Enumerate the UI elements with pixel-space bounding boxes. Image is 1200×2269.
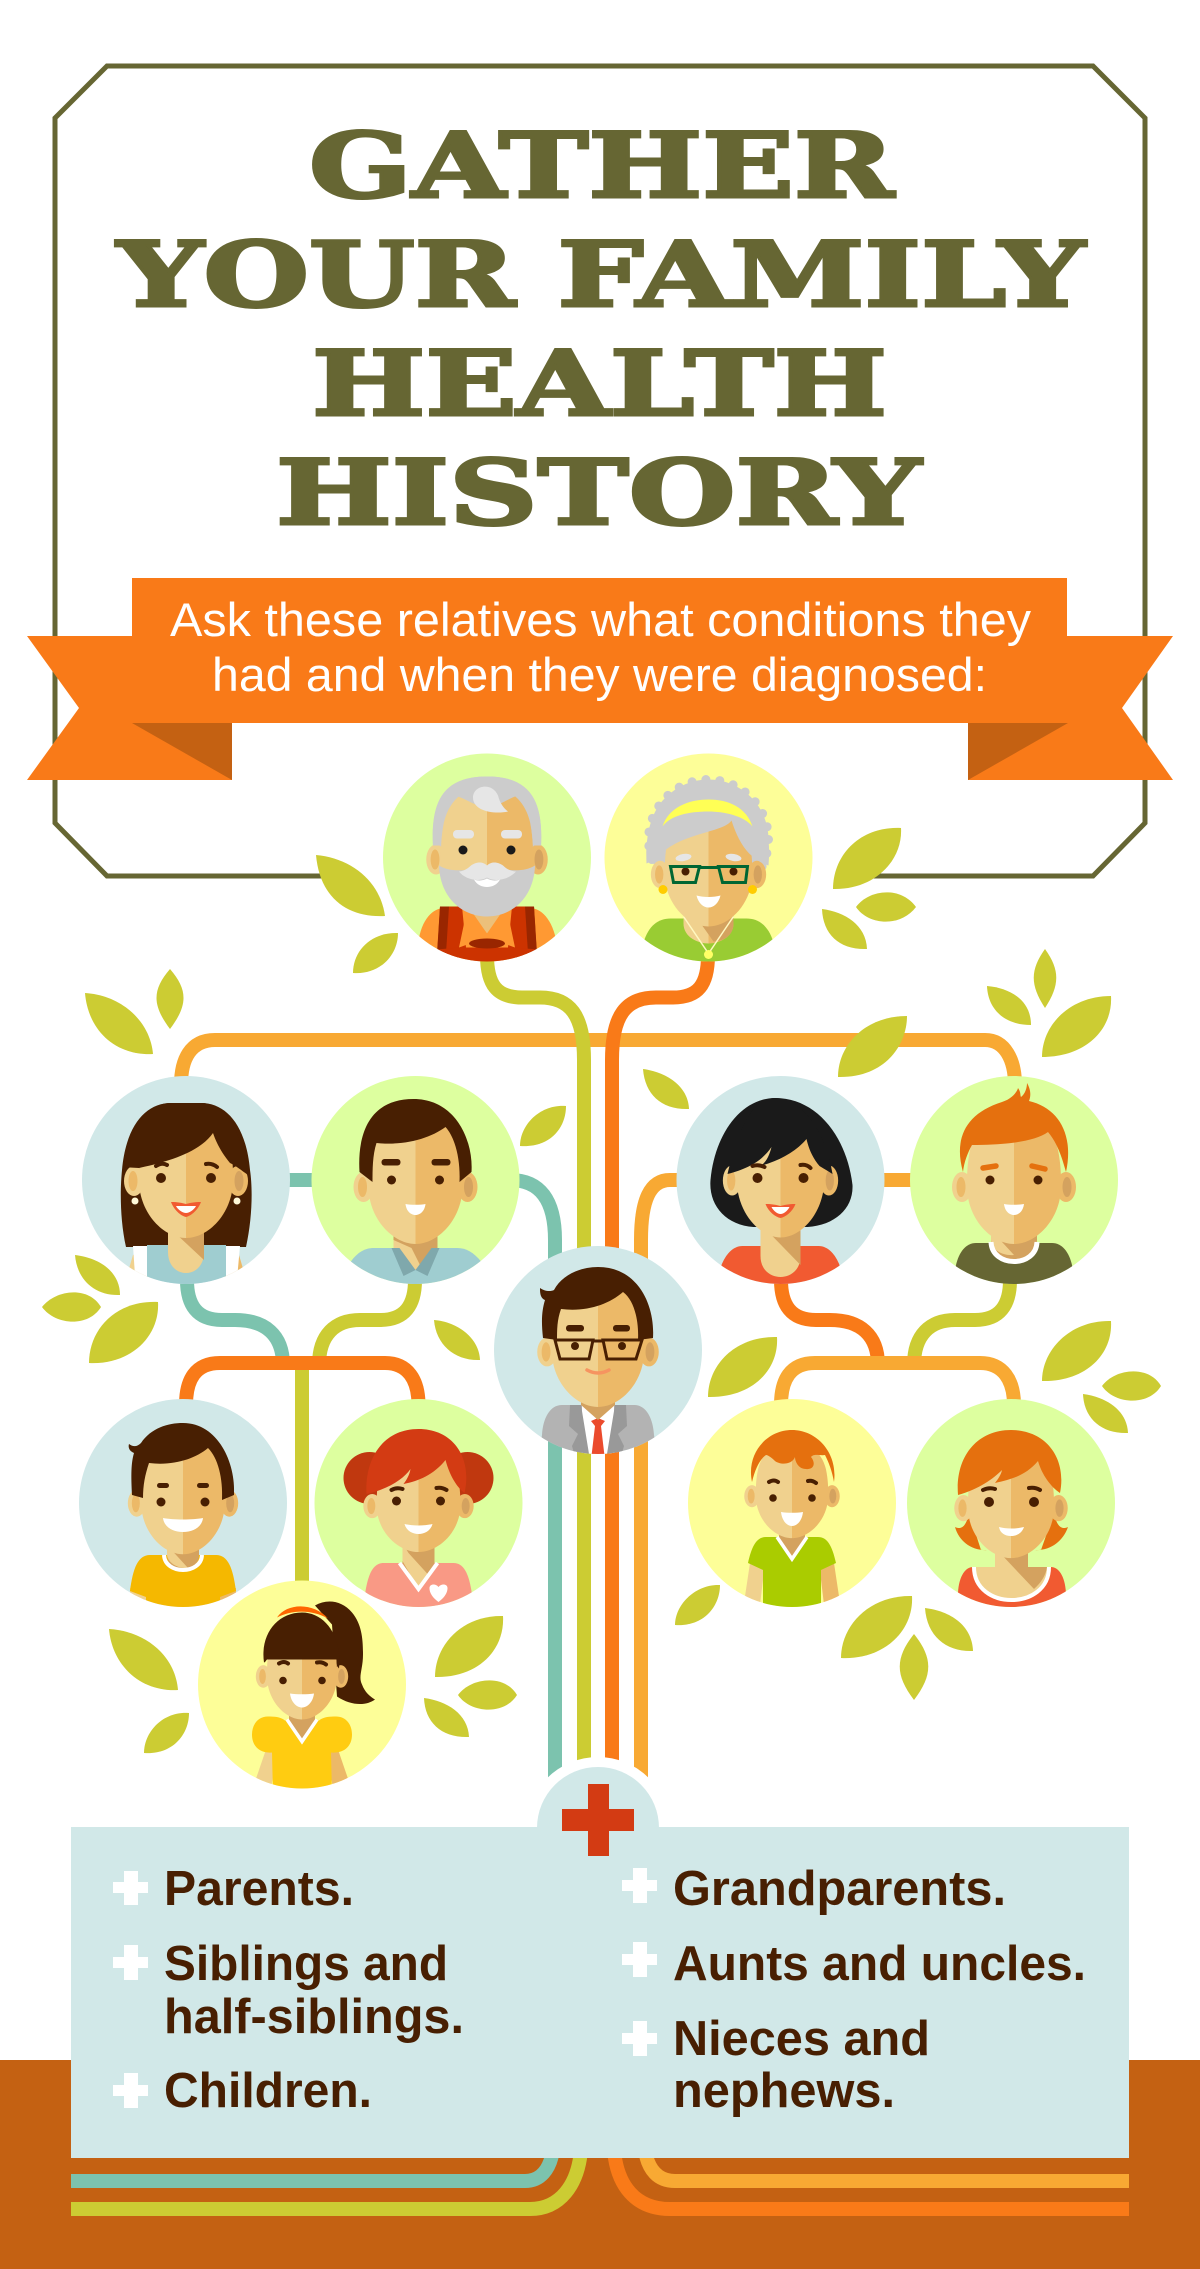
leaves lower row bbox=[109, 1585, 973, 1753]
title: HEALTH bbox=[312, 331, 887, 437]
icon: red medical cross bbox=[562, 1784, 634, 1856]
family tree connecting lines bbox=[181, 955, 1015, 1830]
lines running under the checklist panel bbox=[71, 2150, 1129, 2209]
white halo behind medical tab bbox=[526, 1757, 670, 1901]
title: YOUR FAMILY bbox=[116, 222, 1087, 328]
person: nephew in green shirt bbox=[688, 1399, 896, 1613]
person: mother bbox=[82, 1076, 290, 1290]
left column list: half-siblings. bbox=[164, 1990, 464, 2044]
title bbox=[116, 113, 1087, 546]
right column list bbox=[622, 1862, 1086, 2118]
person: daughter with red hair bbox=[314, 1399, 522, 1613]
title: HISTORY bbox=[276, 440, 923, 546]
title: GATHER bbox=[309, 113, 896, 219]
person: you, centre man with glasses bbox=[494, 1246, 702, 1460]
panel: checklist bbox=[71, 1767, 1129, 2158]
person: uncle bbox=[910, 1076, 1118, 1290]
ribbon banner: had and when they were diagnosed: bbox=[212, 648, 987, 701]
person: son bbox=[79, 1399, 287, 1613]
left column list: Siblings and bbox=[164, 1937, 448, 1991]
left column list: Parents. bbox=[164, 1862, 354, 1916]
right column list: Grandparents. bbox=[673, 1862, 1006, 1916]
connector into girl bbox=[295, 1370, 309, 1600]
left column list: Children. bbox=[164, 2064, 372, 2118]
left column list bbox=[113, 1862, 464, 2118]
ribbon banner bbox=[27, 578, 1173, 780]
leaves upper corners bbox=[85, 949, 1111, 1146]
title frame bbox=[55, 66, 1145, 876]
right column list: nephews. bbox=[673, 2064, 895, 2118]
person: daughter with ponytail bbox=[198, 1580, 406, 1794]
person: niece with orange hair bbox=[907, 1399, 1115, 1613]
brown ground band bbox=[0, 2060, 1200, 2269]
person: grandmother bbox=[604, 754, 812, 968]
right column list: Nieces and bbox=[673, 2012, 930, 2066]
white halo behind girl bbox=[190, 1572, 414, 1796]
leaves near grandparents bbox=[316, 828, 916, 973]
person: grandfather bbox=[383, 754, 591, 968]
leaves middle row bbox=[42, 1255, 1161, 1433]
person: father bbox=[312, 1076, 520, 1290]
ribbon banner: Ask these relatives what conditions they bbox=[170, 593, 1032, 646]
person: aunt bbox=[676, 1076, 884, 1290]
right column list: Aunts and uncles. bbox=[673, 1937, 1086, 1991]
